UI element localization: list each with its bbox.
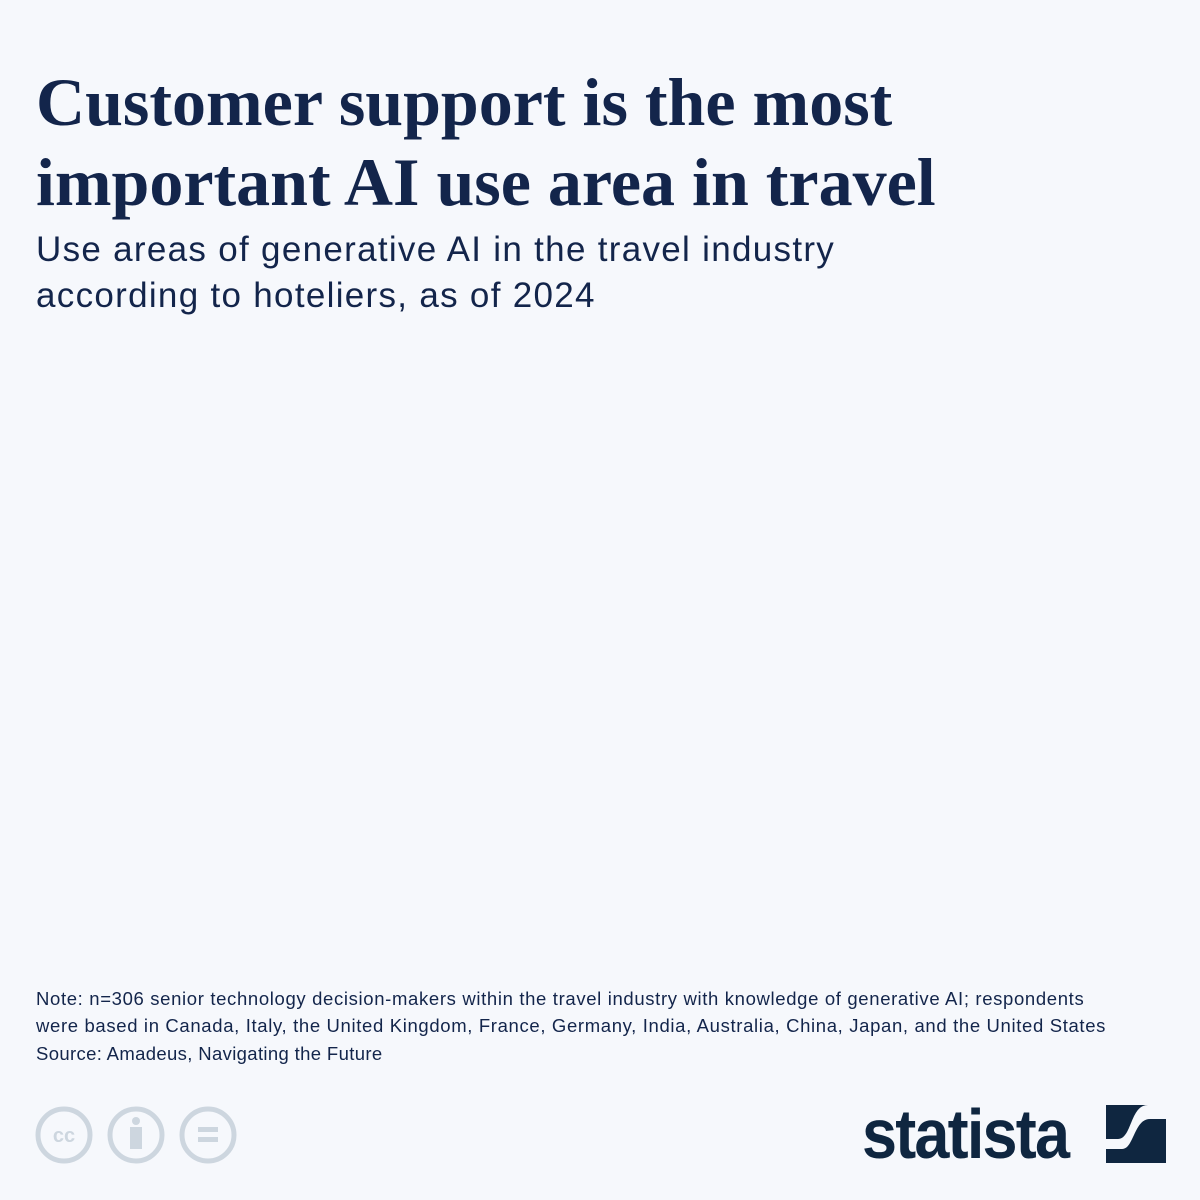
note: Note: n=306 senior technology decision-makers within the travel industry with knowledge of generative AI; respondents bbox=[36, 988, 1084, 1009]
subtitle bbox=[36, 230, 835, 315]
license icons: cc bbox=[53, 1125, 75, 1147]
statista logo bbox=[862, 1095, 1166, 1173]
title: important AI use area in travel bbox=[36, 144, 936, 220]
note bbox=[36, 988, 1106, 1036]
subtitle: Use areas of generative AI in the travel industry bbox=[36, 230, 835, 269]
note: were based in Canada, Italy, the United Kingdom, France, Germany, India, Australia, China, Japan, and the United States bbox=[36, 1015, 1106, 1036]
statista logo: statista bbox=[862, 1095, 1068, 1173]
subtitle: according to hoteliers, as of 2024 bbox=[36, 276, 596, 315]
title bbox=[36, 64, 936, 220]
title: Customer support is the most bbox=[36, 64, 892, 140]
source: Source: Amadeus, Navigating the Future bbox=[36, 1043, 382, 1064]
license icons bbox=[36, 1106, 236, 1164]
